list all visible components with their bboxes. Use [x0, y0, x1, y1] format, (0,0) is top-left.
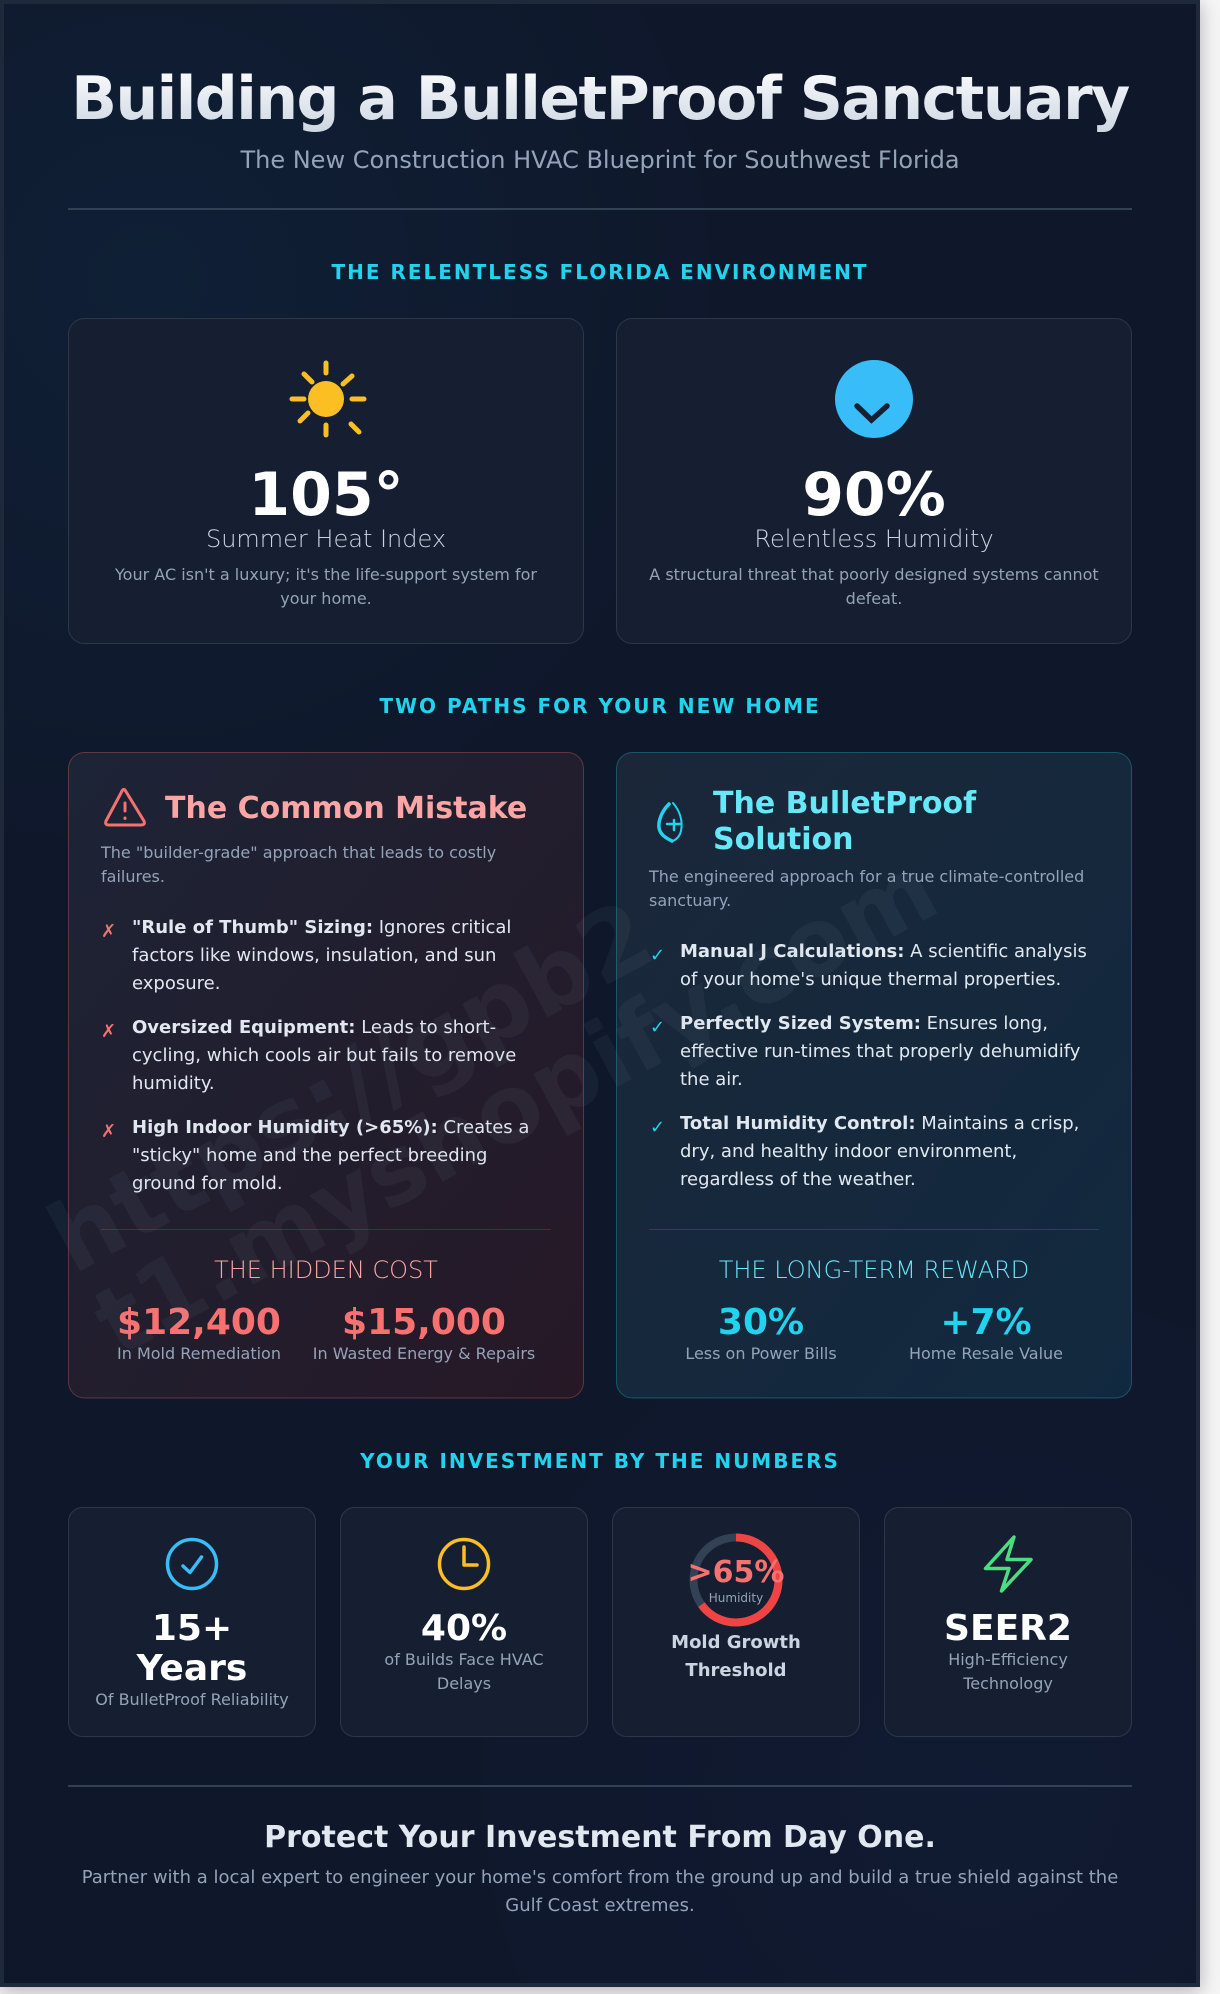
list item: oversized [101, 1017, 516, 1094]
stat: waste: In Wasted Energy & Repairs [313, 1344, 535, 1363]
stat: resale: +7% [940, 1302, 1032, 1343]
list item: rule of thumb: factors like windows, insulation, and sun [132, 945, 496, 966]
heading: environment: THE RELENTLESS FLORIDA ENVIRONMENT [331, 260, 869, 284]
list item: sized system: the air. [680, 1069, 743, 1090]
list item: rule of thumb: exposure. [132, 973, 220, 994]
stat card: years: Years [136, 1648, 247, 1689]
list item: oversized: humidity. [132, 1073, 215, 1094]
stat: waste: $15,000 [342, 1302, 506, 1343]
stat card: delays: of Builds Face HVAC [384, 1650, 544, 1669]
list item: humidity control: regardless of the weather. [680, 1169, 916, 1190]
hidden cost [117, 1256, 535, 1363]
stat card: years: Of BulletProof Reliability [95, 1690, 289, 1709]
stat: resale: Home Resale Value [909, 1344, 1063, 1363]
list item: high humidity: "sticky" home and the perfect breeding [132, 1145, 487, 1166]
heading: common mistake: The Common Mistake [165, 791, 527, 826]
list item: humidity control: ✓ [650, 1117, 665, 1138]
footer text: Gulf Coast extremes. [505, 1895, 695, 1916]
list item: sized system: ✓ [650, 1017, 665, 1038]
list item: high humidity [101, 1117, 529, 1194]
stat: 105: 105° [248, 460, 404, 530]
list item: manual j: of your home's unique thermal properties. [680, 969, 1061, 990]
list item: rule of thumb: Ignores critical [379, 917, 511, 938]
list item: manual j: Manual J Calculations: [680, 941, 904, 962]
list item: oversized: cycling, which cools air but fails to remove [132, 1045, 516, 1066]
list item: oversized: Oversized Equipment: [132, 1017, 355, 1038]
icon: check circle [168, 1540, 216, 1588]
stat card: delays [340, 1508, 588, 1736]
stat card: years: 15+ [152, 1608, 232, 1649]
list item: rule of thumb: "Rule of Thumb" Sizing: [132, 917, 373, 938]
icon: warning [106, 789, 144, 825]
list item: oversized: Leads to short- [361, 1017, 496, 1038]
icon: lightning bolt [986, 1537, 1031, 1591]
stat card: delays: Delays [437, 1674, 491, 1693]
heading: numbers: YOUR INVESTMENT BY THE NUMBERS [359, 1449, 840, 1473]
list item: humidity control: Maintains a crisp, [921, 1113, 1079, 1134]
description: humidity: A structural threat that poorly designed systems cannot [649, 565, 1099, 584]
list item: rule of thumb: ✗ [101, 921, 116, 942]
list item: high humidity: ground for mold. [132, 1173, 283, 1194]
stat: mold [117, 1302, 281, 1363]
stat: power bills [685, 1302, 837, 1363]
list item: humidity control: dry, and healthy indoor environment, [680, 1141, 1017, 1162]
header [71, 64, 1130, 174]
list item: high humidity: High Indoor Humidity (>65%): [132, 1117, 438, 1138]
icon: sun [292, 363, 364, 435]
stat card: seer2 [884, 1508, 1132, 1736]
intro: solution: sanctuary. [649, 891, 731, 910]
description: heat: Your AC isn't a luxury; it's the life-support system for [114, 565, 537, 584]
stat card: mold threshold: Mold Growth [671, 1632, 801, 1653]
hidden cost: THE HIDDEN COST [214, 1256, 438, 1284]
panel: humidity [616, 318, 1132, 644]
watermark: t1.myshopify.com [77, 834, 955, 1378]
list item: humidity control [650, 1113, 1079, 1190]
stat: power bills: 30% [718, 1302, 804, 1343]
stat: resale [909, 1302, 1063, 1363]
stat card: seer2: High-Efficiency [948, 1650, 1068, 1669]
description: heat: your home. [280, 589, 372, 608]
title: Building a BulletProof Sanctuary [71, 64, 1130, 134]
donut gauge: 65 percent: >65% [688, 1555, 784, 1590]
list item: rule of thumb [101, 917, 511, 994]
label: humidity: Relentless Humidity [754, 525, 994, 553]
stat card: delays: 40% [421, 1608, 507, 1649]
panel: solution [616, 752, 1132, 1398]
stat: waste [313, 1302, 535, 1363]
footer [82, 1820, 1118, 1916]
panel: common mistake [68, 752, 584, 1398]
stat card: mold threshold: Threshold [685, 1660, 787, 1681]
donut gauge: 65 percent [688, 1538, 784, 1622]
list item: high humidity: Creates a [443, 1117, 529, 1138]
list item: manual j [650, 941, 1087, 990]
intro: solution: The engineered approach for a true climate-controlled [648, 867, 1084, 886]
list item: humidity control: Total Humidity Control: [680, 1113, 916, 1134]
list item: sized system [650, 1013, 1081, 1090]
heading: solution: The BulletProof [713, 786, 977, 821]
list item: sized system: effective run-times that properly dehumidify [680, 1041, 1081, 1062]
description: humidity: defeat. [846, 589, 902, 608]
donut gauge: 65 percent: Humidity [709, 1591, 763, 1605]
panel: heat [68, 318, 584, 644]
stat card: seer2: SEER2 [944, 1608, 1072, 1649]
icon: clock [440, 1540, 488, 1588]
intro: common mistake: failures. [101, 867, 165, 886]
stat card: years [68, 1508, 316, 1736]
stat: mold: In Mold Remediation [117, 1344, 281, 1363]
label: heat index: Summer Heat Index [206, 525, 446, 553]
list item: high humidity: ✗ [101, 1121, 116, 1142]
footer heading: Protect Your Investment From Day One. [264, 1820, 936, 1855]
stat: power bills: Less on Power Bills [685, 1344, 837, 1363]
intro: common mistake: The "builder-grade" approach that leads to costly [100, 843, 496, 862]
list item: manual j: ✓ [650, 945, 665, 966]
long-term reward: THE LONG-TERM REWARD [719, 1256, 1029, 1284]
stat card: mold threshold [612, 1508, 860, 1736]
list item: oversized: ✗ [101, 1021, 116, 1042]
footer text: Partner with a local expert to engineer your home's comfort from the ground up and build a true shield against the [82, 1867, 1118, 1888]
subtitle: The New Construction HVAC Blueprint for Southwest Florida [239, 146, 960, 174]
heading: solution: Solution [713, 822, 853, 857]
stat: mold: $12,400 [117, 1302, 281, 1343]
stat: 90: 90% [802, 460, 946, 530]
watermark: https://gpb2 [31, 878, 671, 1295]
list item: sized system: Ensures long, [927, 1013, 1048, 1034]
list item: manual j: A scientific analysis [910, 941, 1087, 962]
long-term reward [685, 1256, 1063, 1363]
heading: two paths: TWO PATHS FOR YOUR NEW HOME [379, 694, 821, 718]
list item: sized system: Perfectly Sized System: [680, 1013, 921, 1034]
stat card: seer2: Technology [962, 1674, 1053, 1693]
icon: humidity drop [835, 360, 913, 438]
icon: shield drop [659, 803, 682, 841]
